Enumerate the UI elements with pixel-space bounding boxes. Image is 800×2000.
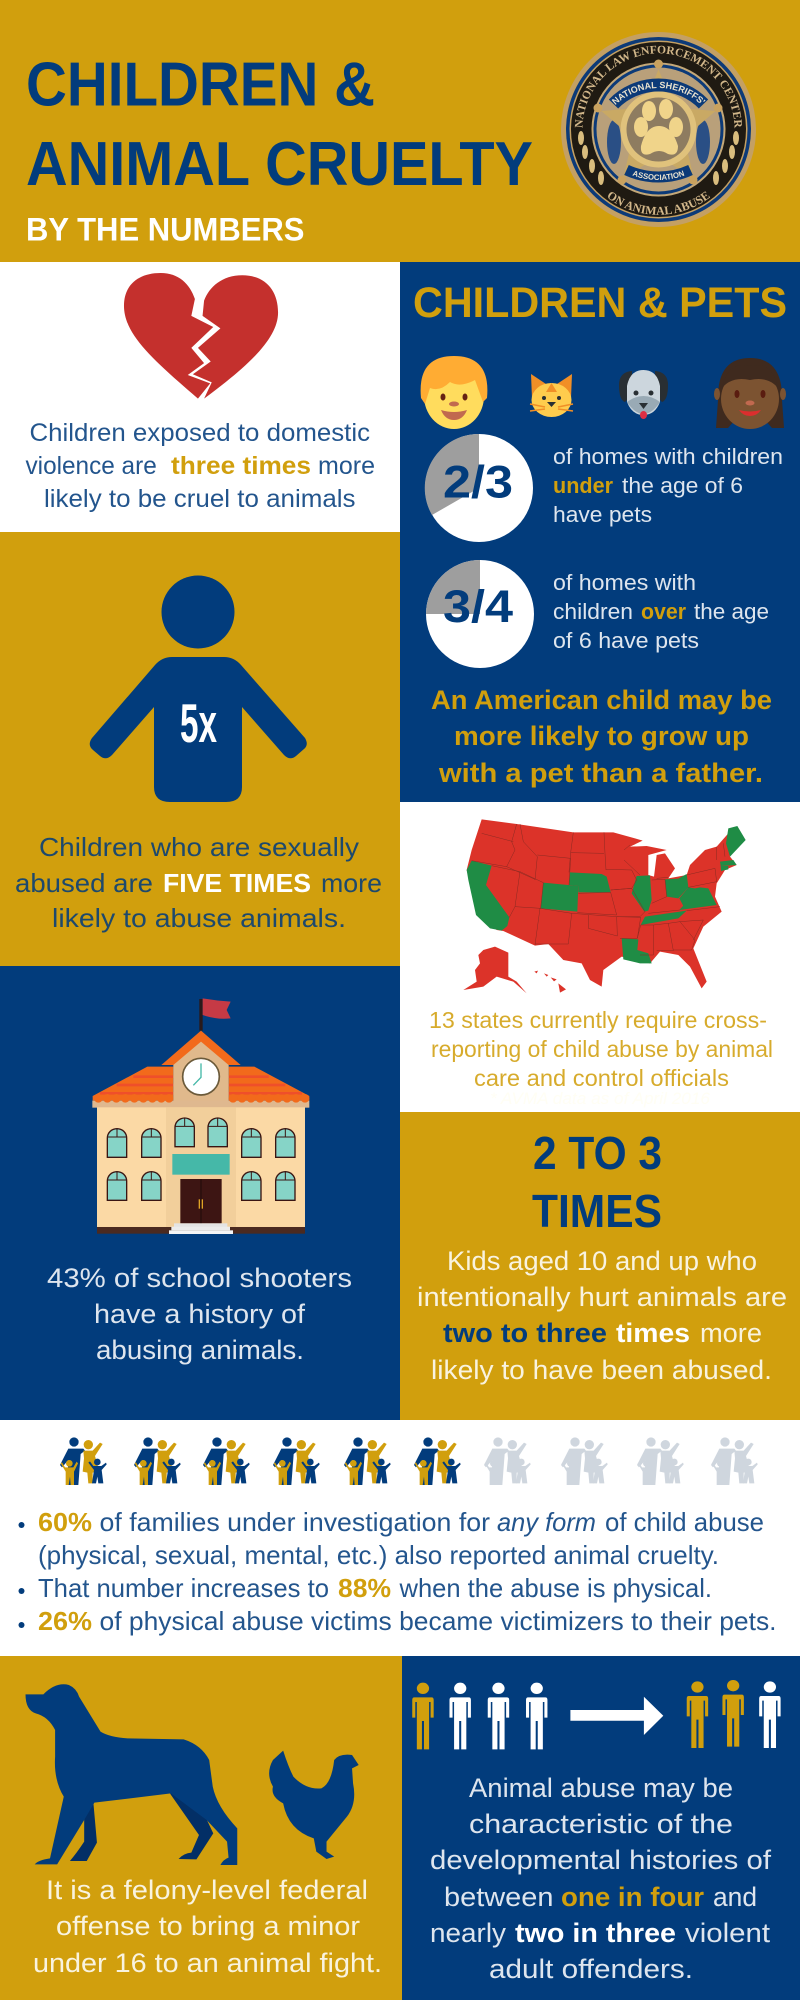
icon: dog (619, 370, 668, 419)
text block: more (318, 452, 375, 480)
text block: and (713, 1882, 757, 1912)
text block: care and control officials (474, 1065, 729, 1091)
map: United States (463, 819, 746, 993)
icon: dog silhouette (26, 1684, 237, 1865)
chart: pie three quarters: 3/4 (443, 581, 513, 632)
text: over 6: over (641, 599, 686, 624)
text: under 6: of homes with children (553, 444, 783, 469)
text block: have a history of (94, 1299, 306, 1329)
text block: violence are (26, 452, 164, 480)
chart: pie two thirds: 2/3 (443, 456, 513, 508)
subtitle: BY THE NUMBERS (26, 212, 304, 248)
heading: CHILDREN & PETS (413, 279, 787, 327)
callout: with a pet than a father. (438, 758, 763, 788)
text block: 43% of school shooters (47, 1263, 352, 1293)
text block: developmental histories of (430, 1845, 772, 1875)
icon: seal of the National Law Enforcement Center on Animal Abuse: NATIONAL SHERIFFS' (612, 82, 706, 105)
icon: broken heart (124, 273, 278, 399)
text block: abused are (15, 868, 153, 898)
text block: characteristic of the (469, 1809, 733, 1839)
text block: violent (685, 1918, 771, 1948)
callout: An American child may be (431, 685, 772, 715)
arrow (570, 1697, 663, 1735)
panel: children and pets (0, 0, 800, 802)
text: over 6: of homes with (553, 570, 696, 595)
icon: four people with one highlighted (412, 1683, 547, 1749)
bullet list: of families under investigation for (100, 1507, 490, 1537)
heading: TIMES (532, 1185, 662, 1237)
text block: more (700, 1318, 762, 1348)
text block: reporting of child abuse by animal (431, 1036, 773, 1062)
text block: under 16 to an animal fight. (33, 1948, 382, 1978)
panel: header (0, 0, 800, 262)
text block: two to three (443, 1318, 607, 1348)
icon: seal of the National Law Enforcement Center on Animal Abuse: NATIONAL LAW ENFORCEMENT CENTER (574, 46, 742, 128)
icon: seal of the National Law Enforcement Center on Animal Abuse: ON ANIMAL ABUSE (608, 191, 710, 215)
icon: three people with two highlighted (687, 1680, 781, 1748)
text block: likely to be cruel to animals (44, 485, 356, 513)
icon: cat (530, 374, 573, 417)
text block: three times (171, 452, 311, 480)
text block: likely to abuse animals. (52, 903, 346, 933)
title (26, 50, 533, 199)
text block: Children who are sexually (39, 832, 359, 862)
icon: child figure (90, 576, 307, 802)
5x label: 5x (180, 692, 217, 754)
panel: domestic violence (0, 0, 400, 532)
text: under 6: under (553, 473, 613, 498)
chart: pie three quarters (426, 560, 534, 668)
footnote: * AVMA data as of April 2016 (490, 1089, 711, 1108)
title: CHILDREN & (26, 50, 375, 120)
heading (532, 1127, 662, 1237)
bullet list: when the abuse is physical. (399, 1573, 712, 1603)
text: under 6: the age of 6 (622, 473, 743, 498)
icon: school building (92, 998, 309, 1234)
icon: seal of the National Law Enforcement Center on Animal Abuse (561, 32, 756, 227)
icon: seal of the National Law Enforcement Center on Animal Abuse: ASSOCIATION (632, 170, 684, 180)
icon: girl (714, 358, 786, 429)
text block: times (616, 1318, 690, 1348)
icon: chicken silhouette (269, 1751, 359, 1859)
bullet list: 88% (338, 1573, 391, 1603)
text block: nearly (430, 1918, 507, 1948)
text: under 6: have pets (553, 502, 652, 527)
text block: abusing animals. (96, 1335, 304, 1365)
text block: more (321, 868, 382, 898)
text block: one in four (561, 1882, 704, 1912)
chart: pie two thirds (425, 434, 533, 542)
chart: ten family icons, six highlighted (60, 1437, 758, 1485)
text block: adult offenders. (489, 1954, 693, 1984)
text block: Children exposed to domestic (30, 419, 370, 447)
text: over 6: of 6 have pets (553, 628, 699, 653)
panel: animal fighting (0, 0, 402, 2000)
title: ANIMAL CRUELTY (26, 130, 533, 199)
icon: boy (421, 356, 487, 429)
text block: offense to bring a minor (56, 1911, 360, 1941)
bullet list: 60% (38, 1507, 92, 1537)
bullet list: any form (497, 1507, 596, 1537)
bullet list: of physical abuse victims became victimizers to their pets. (100, 1606, 776, 1636)
panel: two to three times (0, 0, 800, 1420)
text block: intentionally hurt animals are (417, 1282, 787, 1312)
panel: cross-reporting map (0, 0, 800, 1112)
bullet list: (physical, sexual, mental, etc.) also reported animal cruelty. (38, 1540, 719, 1570)
bullet list: That number increases to (38, 1573, 329, 1603)
text block: 13 states currently require cross- (429, 1007, 767, 1033)
text block: It is a felony-level federal (46, 1875, 368, 1905)
text block: between (444, 1882, 554, 1912)
bullet list: 26% (38, 1606, 92, 1636)
text block: two in three (515, 1918, 676, 1948)
text block: FIVE TIMES (163, 868, 311, 898)
bullet list: of child abuse (605, 1507, 764, 1537)
panel: school shooters (0, 0, 400, 1420)
text block: Kids aged 10 and up who (447, 1246, 757, 1276)
heading: 2 TO 3 (533, 1127, 662, 1179)
text block: Animal abuse may be (469, 1773, 733, 1803)
text: over 6: children (553, 599, 633, 624)
callout: more likely to grow up (454, 721, 749, 751)
text: over 6: the age (694, 599, 769, 624)
text block: likely to have been abused. (431, 1355, 772, 1385)
panel: sexual abuse (0, 0, 400, 966)
